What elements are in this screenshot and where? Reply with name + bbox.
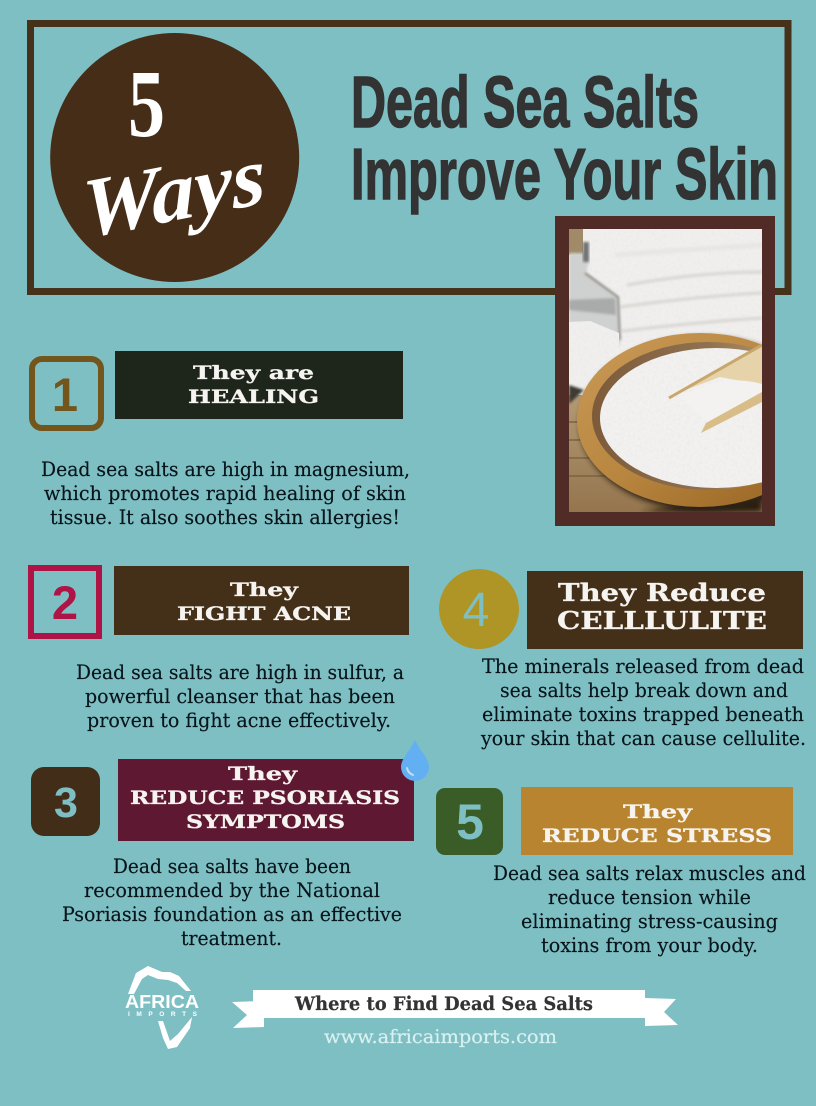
item 3 text: treatment.: [181, 927, 282, 950]
item 5 text: toxins from your body.: [541, 934, 758, 957]
item 3 text: recommended by the National: [84, 879, 380, 902]
ribbon banner: [232, 990, 678, 1028]
badge: 5 Ways: 5: [128, 50, 165, 157]
website url: www.africaimports.com: [324, 1026, 557, 1048]
item 1 number icon: [32, 359, 101, 428]
icon: water drop: [401, 740, 429, 781]
logo: Africa Imports: IMPORTS: [128, 1011, 198, 1018]
item 2 heading: [114, 566, 409, 635]
header frame: [30, 24, 788, 292]
item 3 heading: SYMPTOMS: [186, 812, 345, 833]
item 5 text: [493, 862, 806, 957]
badge: 5 Ways: [50, 33, 299, 282]
title: [351, 63, 778, 215]
item 5 heading: [521, 787, 793, 855]
item 5 text: Dead sea salts relax muscles and: [493, 862, 806, 885]
item 4 text: sea salts help break down and: [500, 679, 788, 702]
item 5 heading: They: [623, 802, 694, 823]
ribbon banner: Where to Find Dead Sea Salts: [294, 993, 593, 1015]
item 4 heading: [527, 571, 803, 649]
item 4 heading: CELLLULITE: [557, 606, 767, 635]
item 3 heading: They: [228, 764, 299, 785]
item 5 number icon: 5: [456, 794, 484, 850]
item 4 text: [480, 655, 806, 750]
item 2 heading: They: [230, 580, 300, 601]
item 4 text: your skin that can cause cellulite.: [480, 727, 806, 750]
item 1 heading: They are: [193, 363, 314, 384]
item 1 text: tissue. It also soothes skin allergies!: [50, 506, 400, 529]
badge: 5 Ways: Ways: [80, 128, 268, 257]
item 2 heading: FIGHT ACNE: [177, 604, 351, 625]
item 3 heading: REDUCE PSORIASIS: [130, 788, 400, 809]
item 2 text: [76, 661, 404, 732]
item 4 heading: They Reduce: [558, 578, 766, 607]
item 3 number icon: 3: [54, 779, 78, 827]
item 3 text: Dead sea salts have been: [113, 855, 351, 878]
logo: Africa Imports: [125, 966, 199, 1049]
item 2 text: powerful cleanser that has been: [85, 685, 395, 708]
item 5 text: reduce tension while: [548, 886, 751, 909]
item 1 heading: [115, 351, 403, 419]
item 2 text: Dead sea salts are high in sulfur, a: [76, 661, 404, 684]
photo: salt bowl and towels: [555, 216, 775, 526]
item 3 heading: [118, 759, 414, 841]
item 3 number icon: [31, 767, 100, 836]
item 3 text: [62, 855, 402, 950]
item 5 text: eliminating stress-causing: [521, 910, 778, 933]
item 5 number icon: [436, 788, 503, 855]
item 1 text: Dead sea salts are high in magnesium,: [41, 458, 410, 481]
logo: Africa Imports: AFRICA: [125, 991, 199, 1012]
item 5 heading: REDUCE STRESS: [542, 826, 772, 847]
item 3 text: Psoriasis foundation as an effective: [62, 903, 402, 926]
item 2 number icon: 2: [52, 576, 78, 629]
item 2 text: proven to fight acne effectively.: [87, 709, 391, 732]
item 4 number icon: [439, 569, 519, 649]
item 4 text: eliminate toxins trapped beneath: [482, 703, 804, 726]
item 4 number icon: 4: [463, 584, 489, 637]
item 1 text: which promotes rapid healing of skin: [44, 482, 406, 505]
item 1 heading: HEALING: [188, 387, 319, 408]
item 1 text: [41, 458, 410, 529]
item 2 number icon: [31, 568, 99, 636]
item 1 number icon: 1: [52, 368, 78, 421]
item 4 text: The minerals released from dead: [482, 655, 804, 678]
